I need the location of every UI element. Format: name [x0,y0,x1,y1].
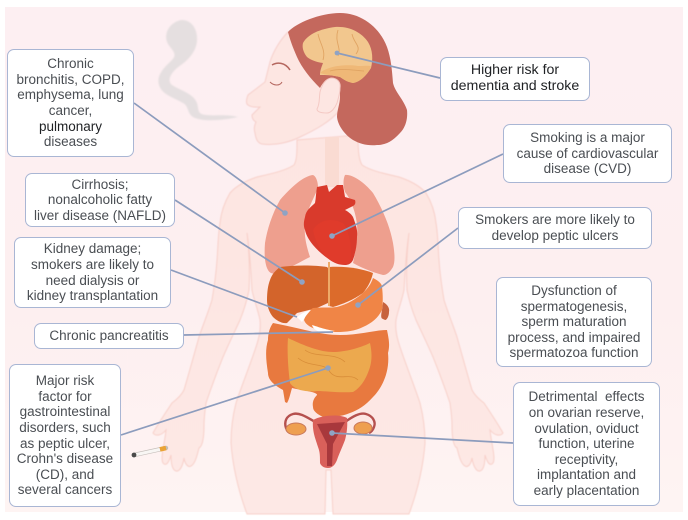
callout: liver [25,173,175,227]
stomach [304,278,383,332]
callout: liver: liver disease (NAFLD) [34,208,166,223]
cigarette [132,448,166,457]
callout: lungs: diseases [44,134,97,149]
callout: pancreas [34,323,184,349]
callout: gastrointestinal: gastrointestinal [20,404,110,419]
leader dots [282,51,361,436]
brain [303,27,372,83]
diaphragm vessel [328,262,330,306]
callout: ovarian: implantation and [537,467,636,482]
callout: liver: Cirrhosis; [71,177,128,192]
callout: gastrointestinal: Crohn's disease [17,451,113,466]
callout: cardiovascular: Smoking is a major [530,130,645,145]
callout: gastrointestinal: factor for [38,389,92,404]
callout: lungs: Chronic [47,56,94,71]
callout: brain: Higher risk for [471,62,559,78]
callout: ovarian: ovulation, oviduct [534,421,639,436]
reproductive system [285,414,375,468]
callout: gastrointestinal: several cancers [18,482,112,497]
callout: lungs [7,49,134,157]
callout: stomach: Smokers are more likely to [475,212,635,227]
callout: kidney: need dialysis or [46,272,139,288]
callout: ovarian: function, uterine [538,436,635,451]
trachea [325,137,339,187]
callout: cardiovascular: disease (CVD) [544,161,631,176]
callout: ovarian: early placentation [534,483,639,498]
callout: ovarian: receptivity, [555,452,618,467]
hair [288,13,407,145]
heart [304,185,357,265]
callout: lungs: cancer, [49,103,92,118]
callout: kidney: kidney transplantation [27,288,158,303]
callout: ovarian: Detrimental effects [528,389,645,404]
ear [317,78,340,113]
callout: spermatogenesis: process, and impaired [508,330,640,345]
callout: lungs: bronchitis, COPD, [16,72,125,87]
lungs [265,175,394,275]
callout: kidney [14,237,171,308]
callout: spermatogenesis: spermatozoa function [509,345,639,360]
callout: kidney: smokers are likely to [31,257,154,272]
callout: ovarian [513,382,660,506]
body silhouette [153,32,503,514]
callout: ovarian: on ovarian reserve, [529,405,644,420]
callout: stomach [458,207,652,249]
callout: pancreas: Chronic pancreatitis [49,328,169,343]
callout: cardiovascular [503,124,672,183]
callout: spermatogenesis: spermatogenesis, [521,299,627,314]
callout: gastrointestinal: Major risk [36,373,94,388]
liver [267,266,330,323]
spleen [381,302,389,320]
callout: kidney: Kidney damage; [44,241,141,256]
callout: gastrointestinal: (CD), and [36,467,94,482]
callout: gastrointestinal [9,364,121,507]
callout: brain: dementia and stroke [451,78,579,94]
eye and brow [270,63,290,85]
callout: lungs: emphysema, lung [17,87,124,102]
callout: spermatogenesis: Dysfunction of [531,283,617,298]
callout: spermatogenesis: sperm maturation [521,314,627,329]
large intestine [266,323,389,417]
callout: lungs: pulmonary [39,119,102,134]
callout: spermatogenesis [496,277,652,367]
leader lines [121,53,513,443]
callout: gastrointestinal: as peptic ulcer, [20,436,110,450]
callout: cardiovascular: cause of cardiovascular [517,146,658,161]
smoke plume [158,20,238,120]
small intestine [288,338,372,392]
pancreas gap [297,310,335,333]
callout: brain [440,57,590,101]
callout: liver: nonalcoholic fatty [48,192,152,207]
callout: gastrointestinal: disorders, such [19,420,111,435]
callout: stomach: develop peptic ulcers [492,228,618,243]
